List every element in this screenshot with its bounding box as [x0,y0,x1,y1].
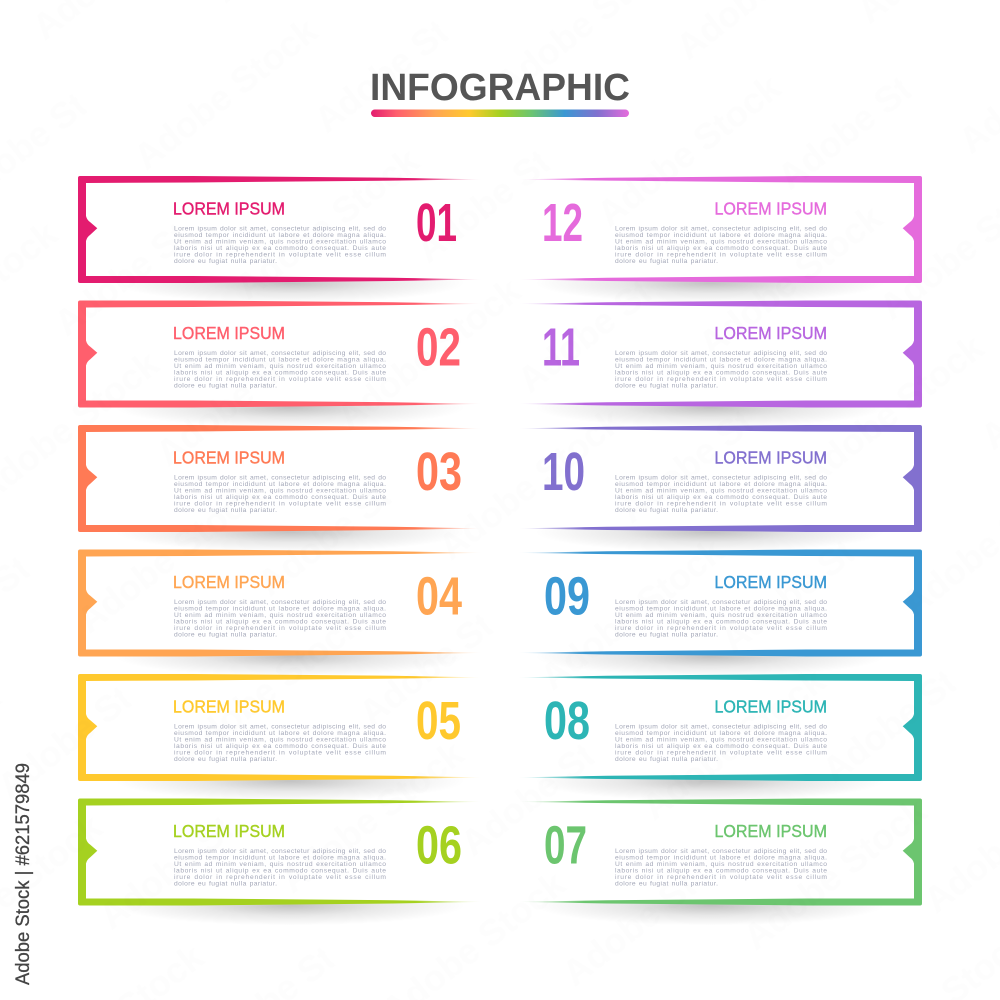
body text 02: Lorem ipsum dolor sit amet, consectetur adipiscing elit, sed do [174,350,386,357]
body text 11 [615,350,827,389]
body text 11: Ut enim ad minim veniam, quis nostrud exercitation ullamco [615,363,827,370]
heading 09: LOREM IPSUM [714,572,827,592]
number 01: 01 [416,193,457,253]
panel 05 [78,674,484,801]
body text 10: irure dolor in reprehenderit in voluptate velit esse cillum [615,500,827,507]
body text 09: Ut enim ad minim veniam, quis nostrud exercitation ullamco [615,612,827,619]
body text 05: laboris nisi ut aliquip ex ea commodo consequat. Duis aute [174,743,386,750]
body text 03: irure dolor in reprehenderit in voluptate velit esse cillum [174,500,386,507]
body text 11: irure dolor in reprehenderit in voluptate velit esse cillum [615,376,827,383]
body text 12: irure dolor in reprehenderit in voluptate velit esse cillum [615,251,827,258]
heading 02: LOREM IPSUM [173,323,285,343]
body text 04: eiusmod tempor incididunt ut labore et dolore magna aliqua. [174,605,386,612]
body text 10 [615,474,827,514]
number 06: 06 [416,816,462,876]
panel 06 [78,798,484,926]
body text 03: eiusmod tempor incididunt ut labore et dolore magna aliqua. [174,481,386,488]
body text 05: Lorem ipsum dolor sit amet, consectetur adipiscing elit, sed do [174,723,386,730]
body text 02: laboris nisi ut aliquip ex ea commodo consequat. Duis aute [174,369,386,376]
body text 07 [615,848,827,887]
body text 08: laboris nisi ut aliquip ex ea commodo consequat. Duis aute [615,743,827,750]
body text 04: Ut enim ad minim veniam, quis nostrud exercitation ullamco [174,612,386,619]
body text 08: Lorem ipsum dolor sit amet, consectetur adipiscing elit, sed do [615,723,827,730]
body text 01: dolore eu fugiat nulla pariatur. [174,258,277,265]
body text 10: Ut enim ad minim veniam, quis nostrud exercitation ullamco [615,487,827,494]
body text 09 [615,599,827,638]
body text 06 [174,848,386,887]
number 09: 09 [544,566,590,626]
frame 01 [78,176,482,283]
frame 05 [78,674,482,781]
body text 07: Lorem ipsum dolor sit amet, consectetur adipiscing elit, sed do [615,848,827,855]
body text 04: laboris nisi ut aliquip ex ea commodo consequat. Duis aute [174,618,386,625]
heading 05: LOREM IPSUM [173,696,285,716]
body text 01 [174,225,386,265]
frame 02 [78,300,482,408]
body text 12: eiusmod tempor incididunt ut labore et dolore magna aliqua. [615,232,827,239]
body text 01: irure dolor in reprehenderit in voluptate velit esse cillum [174,251,386,258]
body text 03: Lorem ipsum dolor sit amet, consectetur adipiscing elit, sed do [174,474,386,481]
number 03: 03 [416,442,462,502]
body text 08: eiusmod tempor incididunt ut labore et dolore magna aliqua. [615,730,827,737]
body text 07: Ut enim ad minim veniam, quis nostrud exercitation ullamco [615,861,827,868]
number 11: 11 [542,318,580,378]
body text 10: laboris nisi ut aliquip ex ea commodo consequat. Duis aute [615,494,827,501]
body text 02: dolore eu fugiat nulla pariatur. [174,382,277,389]
number 02: 02 [416,318,461,378]
body text 04: Lorem ipsum dolor sit amet, consectetur adipiscing elit, sed do [174,599,386,606]
panel 04 [78,550,484,676]
body text 07: eiusmod tempor incididunt ut labore et dolore magna aliqua. [615,854,827,861]
number 08: 08 [544,691,590,751]
title: INFOGRAPHIC [370,67,630,109]
body text 05: eiusmod tempor incididunt ut labore et dolore magna aliqua. [174,730,386,737]
frame 06 [78,798,482,906]
body text 07: irure dolor in reprehenderit in voluptate velit esse cillum [615,874,827,881]
body text 10: Lorem ipsum dolor sit amet, consectetur adipiscing elit, sed do [615,474,827,481]
body text 01: Ut enim ad minim veniam, quis nostrud exercitation ullamco [174,238,386,245]
frame 08 [518,674,922,781]
body text 01: laboris nisi ut aliquip ex ea commodo consequat. Duis aute [174,245,386,252]
panel 10 [516,425,922,552]
body text 09: Lorem ipsum dolor sit amet, consectetur adipiscing elit, sed do [615,599,827,606]
body text 12 [615,225,827,265]
panel 01 [78,176,484,303]
frame 04 [78,550,482,656]
heading 03: LOREM IPSUM [173,447,285,467]
body text 09: eiusmod tempor incididunt ut labore et dolore magna aliqua. [615,605,827,612]
body text 04: irure dolor in reprehenderit in voluptate velit esse cillum [174,625,386,632]
body text 06: Lorem ipsum dolor sit amet, consectetur adipiscing elit, sed do [174,848,386,855]
body text 06: laboris nisi ut aliquip ex ea commodo consequat. Duis aute [174,867,386,874]
body text 03: dolore eu fugiat nulla pariatur. [174,507,277,514]
panel 12 [516,176,922,303]
frame 07 [518,798,922,906]
heading 08: LOREM IPSUM [714,696,827,716]
body text 04: dolore eu fugiat nulla pariatur. [174,631,277,638]
body text 03: Ut enim ad minim veniam, quis nostrud exercitation ullamco [174,487,386,494]
frame 11 [518,300,922,408]
body text 12: Ut enim ad minim veniam, quis nostrud exercitation ullamco [615,238,827,245]
number 12: 12 [542,193,583,253]
body text 08 [615,723,827,763]
frame 09 [518,550,922,656]
body text 06: Ut enim ad minim veniam, quis nostrud exercitation ullamco [174,861,386,868]
number 05: 05 [416,691,461,751]
body text 05: irure dolor in reprehenderit in voluptate velit esse cillum [174,749,386,756]
body text 11: dolore eu fugiat nulla pariatur. [615,382,718,389]
body text 01: Lorem ipsum dolor sit amet, consectetur adipiscing elit, sed do [174,225,386,232]
body text 03: laboris nisi ut aliquip ex ea commodo consequat. Duis aute [174,494,386,501]
heading 01: LOREM IPSUM [173,198,285,218]
body text 11: laboris nisi ut aliquip ex ea commodo consequat. Duis aute [615,369,827,376]
number 10: 10 [542,442,585,502]
body text 09: laboris nisi ut aliquip ex ea commodo consequat. Duis aute [615,618,827,625]
heading 10: LOREM IPSUM [714,447,827,467]
body text 02: eiusmod tempor incididunt ut labore et dolore magna aliqua. [174,356,386,363]
heading 12: LOREM IPSUM [714,198,827,218]
body text 12: laboris nisi ut aliquip ex ea commodo consequat. Duis aute [615,245,827,252]
heading 06: LOREM IPSUM [173,821,285,841]
body text 07: laboris nisi ut aliquip ex ea commodo consequat. Duis aute [615,867,827,874]
body text 07: dolore eu fugiat nulla pariatur. [615,880,718,887]
frame 03 [78,425,482,532]
panel 07 [516,798,922,926]
body text 02: Ut enim ad minim veniam, quis nostrud exercitation ullamco [174,363,386,370]
body text 10: eiusmod tempor incididunt ut labore et dolore magna aliqua. [615,481,827,488]
body text 02: irure dolor in reprehenderit in voluptate velit esse cillum [174,376,386,383]
body text 03 [174,474,386,514]
body text 08: Ut enim ad minim veniam, quis nostrud exercitation ullamco [615,736,827,743]
body text 09: irure dolor in reprehenderit in voluptate velit esse cillum [615,625,827,632]
body text 08: dolore eu fugiat nulla pariatur. [615,756,718,763]
panel 08 [516,674,922,801]
heading 04: LOREM IPSUM [173,572,285,592]
body text 02 [174,350,386,389]
panel 11 [516,300,922,428]
stock id text: Adobe Stock | #621579849 [12,763,34,985]
frame 12 [518,176,922,283]
body text 11: eiusmod tempor incididunt ut labore et dolore magna aliqua. [615,356,827,363]
title rainbow underline [371,110,629,117]
body text 05: dolore eu fugiat nulla pariatur. [174,756,277,763]
body text 12: Lorem ipsum dolor sit amet, consectetur adipiscing elit, sed do [615,225,827,232]
body text 10: dolore eu fugiat nulla pariatur. [615,507,718,514]
body text 06: dolore eu fugiat nulla pariatur. [174,880,277,887]
heading 07: LOREM IPSUM [714,821,827,841]
body text 12: dolore eu fugiat nulla pariatur. [615,258,718,265]
panel 03 [78,425,484,552]
body text 06: eiusmod tempor incididunt ut labore et dolore magna aliqua. [174,854,386,861]
body text 11: Lorem ipsum dolor sit amet, consectetur adipiscing elit, sed do [615,350,827,357]
heading 11: LOREM IPSUM [714,323,827,343]
panel 02 [78,300,484,428]
body text 08: irure dolor in reprehenderit in voluptate velit esse cillum [615,749,827,756]
body text 01: eiusmod tempor incididunt ut labore et dolore magna aliqua. [174,232,386,239]
panel 09 [516,550,922,676]
number 07: 07 [544,816,587,876]
frame 10 [518,425,922,532]
body text 04 [174,599,386,638]
body text 05 [174,723,386,763]
body text 06: irure dolor in reprehenderit in voluptate velit esse cillum [174,874,386,881]
number 04: 04 [416,566,462,626]
body text 09: dolore eu fugiat nulla pariatur. [615,631,718,638]
body text 05: Ut enim ad minim veniam, quis nostrud exercitation ullamco [174,736,386,743]
